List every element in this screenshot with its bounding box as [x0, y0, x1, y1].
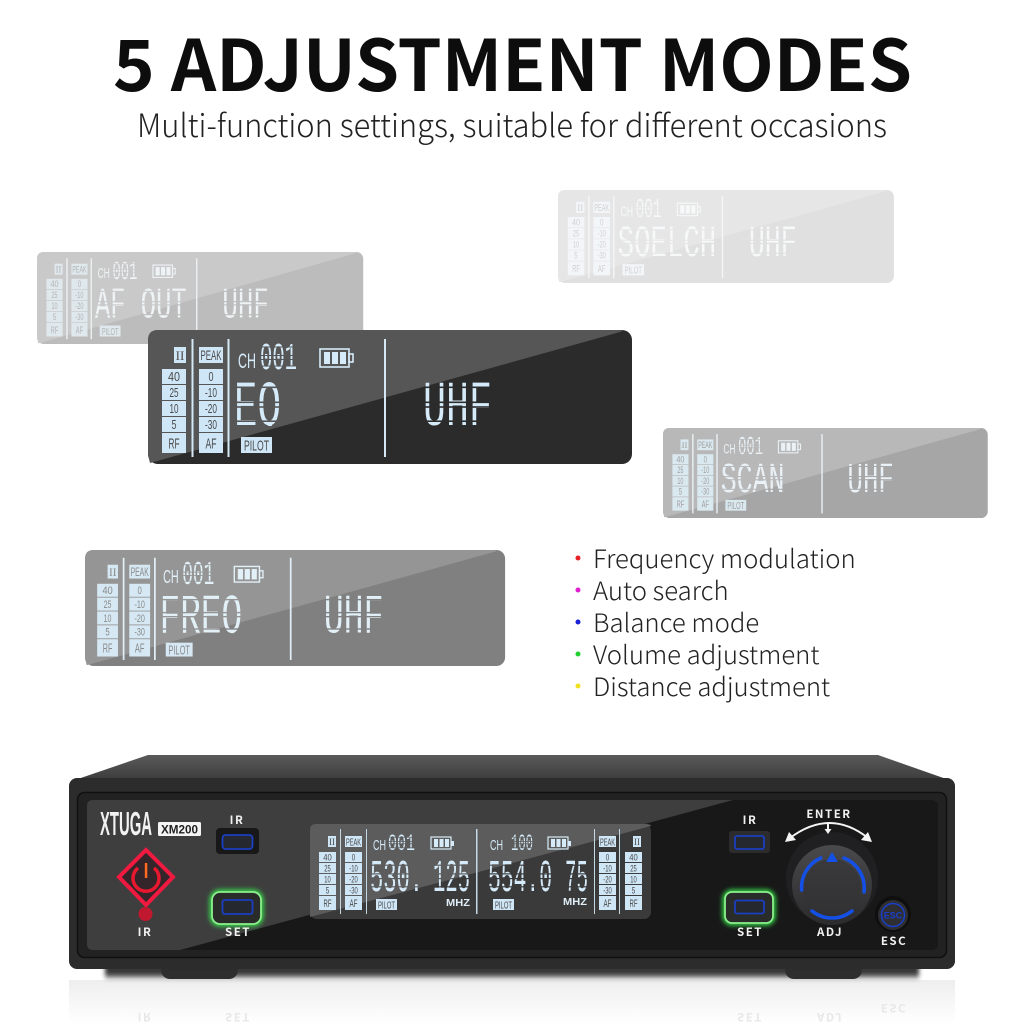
list item: frequency modulation: Frequency modulation — [593, 539, 856, 576]
panel: af out display: -30 — [75, 312, 84, 322]
right channel readout: 100 — [511, 831, 533, 857]
power button — [119, 850, 173, 905]
label: SET right: SET — [737, 924, 763, 940]
panel: af out display: -10 — [75, 290, 84, 300]
panel: af out display — [37, 252, 363, 344]
left channel readout: MHZ — [446, 897, 471, 909]
panel: freq display: 25 — [104, 599, 111, 611]
device bezel — [78, 792, 946, 958]
left channel readout: 001 — [388, 831, 415, 857]
list item: auto search: Auto search — [593, 571, 729, 608]
panel: squelch display: -10 — [598, 228, 606, 238]
panel: squelch display: 0 — [600, 217, 603, 227]
panel: scan display: 001 — [738, 433, 763, 462]
panel: scan display: II — [682, 440, 687, 450]
right meters: -30 — [603, 886, 612, 896]
right meters: 10 — [630, 874, 637, 884]
right meters: 40 — [629, 852, 638, 862]
left meters: -20 — [349, 874, 358, 884]
panel: freq display: -20 — [134, 613, 145, 625]
panel: af out display: CH — [98, 266, 110, 282]
panel: freq display: CH — [163, 567, 179, 587]
panel: freq display: AF — [135, 641, 144, 656]
enter arrows — [785, 822, 872, 842]
right meters: PEAK — [600, 838, 615, 848]
panel: freq display: UHF — [324, 586, 384, 649]
panel: af out display: II — [56, 265, 62, 275]
panel: af out display: UHF — [222, 282, 269, 331]
device feet — [161, 960, 862, 979]
panel: scan display: AF — [702, 500, 709, 511]
panel: af out display: PILOT — [102, 327, 119, 338]
label: enter: ENTER — [806, 806, 852, 822]
device reflection: ESC — [881, 1000, 907, 1016]
panel: squelch display: RF — [572, 264, 580, 275]
panel: squelch display: CH — [620, 204, 633, 220]
panel: freq display — [85, 550, 505, 666]
panel: squelch display: SQELCH — [618, 220, 716, 270]
panel: squelch display: AF — [598, 264, 606, 275]
left meters: RF — [324, 898, 332, 910]
panel: af out display: 001 — [112, 257, 137, 287]
right meters: -10 — [603, 864, 612, 874]
panel: freq display: 0 — [138, 585, 142, 597]
esc button — [875, 896, 911, 932]
panel: main lcd — [310, 824, 651, 919]
subtitle: Multi-function settings, suitable for different occasions — [137, 101, 887, 147]
panel: squelch display: II — [577, 203, 583, 213]
device reflection — [69, 980, 955, 1024]
red indicator led — [138, 907, 152, 921]
left meters: II — [329, 837, 335, 847]
panel: eq display (active): 001 — [260, 338, 297, 381]
panel: af out display: 40 — [50, 279, 59, 289]
right meters: 5 — [632, 886, 635, 896]
right channel readout — [488, 831, 588, 912]
panel: eq display (active): 0 — [208, 369, 214, 384]
adj knob — [786, 832, 878, 925]
panel: eq display (active): 5 — [172, 417, 176, 432]
panel: scan display: -20 — [701, 476, 709, 486]
right meters: 25 — [630, 864, 637, 874]
device body — [69, 778, 955, 969]
panel: scan display: 10 — [677, 476, 684, 486]
panel: squelch display: 10 — [573, 240, 579, 250]
feature list — [576, 539, 856, 704]
panel: scan display: PEAK — [698, 439, 713, 450]
panel: freq display: PEAK — [131, 565, 149, 579]
panel: af out display: AF — [76, 325, 83, 336]
panel: freq display: 5 — [105, 627, 110, 639]
panel: eq display (active): PEAK — [200, 347, 222, 363]
list item: distance adjustment: Distance adjustment — [593, 667, 830, 704]
right meters: AF — [604, 898, 612, 910]
panel: squelch display: UHF — [749, 220, 797, 270]
left meters: 0 — [352, 852, 355, 862]
brand logo: XTUGA — [100, 805, 152, 842]
panel: af out display: 0 — [78, 279, 81, 289]
panel: squelch display: 40 — [572, 217, 580, 227]
right meters: -20 — [603, 874, 612, 884]
panel: main lcd: 75 — [565, 854, 588, 905]
panel: squelch display: -30 — [598, 251, 606, 261]
panel: af out display: PEAK — [72, 265, 87, 276]
device shadow — [105, 966, 919, 982]
label: IR button left: IR — [230, 812, 244, 828]
panel: scan display: -10 — [701, 465, 709, 475]
left meters: 25 — [324, 864, 331, 874]
panel: eq display (active) — [148, 330, 632, 464]
panel: main lcd: 125 — [433, 854, 470, 905]
device top face — [72, 755, 952, 781]
panel: freq display: -10 — [134, 599, 145, 611]
panel: eq display (active): AF — [206, 436, 216, 452]
button: SET left — [212, 892, 261, 924]
list item: volume adjustment: Volume adjustment — [593, 635, 819, 672]
panel: eq display (active): UHF — [423, 373, 492, 445]
right meters: RF — [630, 898, 638, 910]
panel: af out display: 25 — [51, 290, 58, 300]
panel: af out display: RF — [51, 325, 58, 336]
panel: af out display: 10 — [51, 301, 58, 311]
device: wireless receiver — [69, 755, 955, 1024]
right meters: 0 — [606, 852, 609, 862]
panel: freq display: 40 — [102, 585, 113, 597]
button: SET right — [725, 892, 773, 923]
panel: squelch display: 5 — [574, 251, 578, 261]
panel: squelch display — [558, 190, 894, 283]
panel: freq display: II — [109, 567, 117, 579]
panel: eq display (active): -10 — [205, 385, 217, 400]
button: IR left — [216, 828, 259, 854]
panel: scan display: SCAN — [721, 456, 784, 505]
panel: eq display (active): II — [176, 348, 184, 363]
panel: freq display: RF — [103, 641, 112, 656]
panel: af out display: AF OUT — [95, 282, 187, 331]
left meters: 10 — [324, 874, 331, 884]
label: SET left: SET — [225, 924, 251, 940]
device face — [87, 800, 938, 950]
panel: squelch display: 001 — [636, 195, 661, 225]
left channel readout: 530. — [370, 854, 423, 905]
panel: eq display (active): 10 — [170, 401, 178, 416]
panel: scan display: CH — [723, 441, 735, 457]
right channel readout: MHZ — [563, 896, 588, 908]
panel: freq display: FREQ — [160, 586, 242, 649]
panel: eq display (active): 25 — [170, 385, 178, 400]
panel: freq display: 10 — [104, 613, 111, 625]
right channel readout: 554.0 — [488, 854, 552, 905]
left channel readout — [370, 831, 471, 912]
panel: squelch display: 25 — [573, 228, 579, 238]
panel: scan display: 40 — [676, 454, 685, 464]
panel: scan display — [663, 428, 988, 518]
panel: scan display: 5 — [679, 487, 682, 497]
button: IR right — [729, 831, 770, 853]
left channel readout: PILOT — [378, 900, 395, 912]
right meters: II — [634, 837, 640, 847]
left meters: -30 — [349, 886, 358, 896]
right channel readout: CH — [490, 837, 503, 854]
panel: freq display: PILOT — [168, 642, 190, 657]
panel: scan display: -30 — [701, 487, 709, 497]
panel: eq display (active): -30 — [205, 417, 217, 432]
panel: squelch display: PEAK — [594, 203, 609, 214]
panel: scan display: UHF — [848, 456, 894, 505]
panel: eq display (active): RF — [168, 436, 180, 452]
panel: scan display: PILOT — [727, 501, 744, 512]
panel: freq display: 001 — [182, 557, 214, 594]
panel: af out display: -20 — [75, 301, 84, 311]
panel: eq display (active): -20 — [205, 401, 217, 416]
brand logo: XM200 — [161, 824, 198, 836]
right meters — [599, 836, 642, 910]
list item: balance mode: Balance mode — [593, 603, 759, 640]
panel: scan display: 0 — [704, 454, 707, 464]
panel: eq display (active): CH — [238, 350, 256, 373]
label: IR button right: IR — [743, 812, 757, 828]
right channel readout: PILOT — [495, 900, 512, 912]
left meters: -10 — [349, 864, 358, 874]
panel: squelch display: PILOT — [625, 266, 642, 277]
panel: eq display (active): 40 — [168, 369, 180, 384]
panel: freq display: -30 — [134, 627, 145, 639]
esc button: ESC — [884, 910, 903, 920]
left meters: PEAK — [346, 838, 361, 848]
left meters: 5 — [326, 886, 329, 896]
left meters — [319, 836, 362, 910]
left meters: AF — [350, 898, 358, 910]
label: esc: ESC — [881, 933, 907, 949]
panel: af out display: 5 — [53, 312, 56, 322]
label: adj: ADJ — [816, 924, 843, 940]
panel: scan display: 25 — [677, 465, 684, 475]
panel: eq display (active): PILOT — [244, 438, 269, 454]
panel: eq display (active): EQ — [234, 373, 281, 445]
left meters: 40 — [323, 852, 332, 862]
panel: scan display: RF — [677, 500, 684, 511]
left channel readout: CH — [373, 837, 386, 854]
label: IR left: IR — [138, 924, 152, 940]
panel: squelch display: -20 — [598, 240, 606, 250]
title: 5 ADJUSTMENT MODES — [113, 10, 912, 112]
